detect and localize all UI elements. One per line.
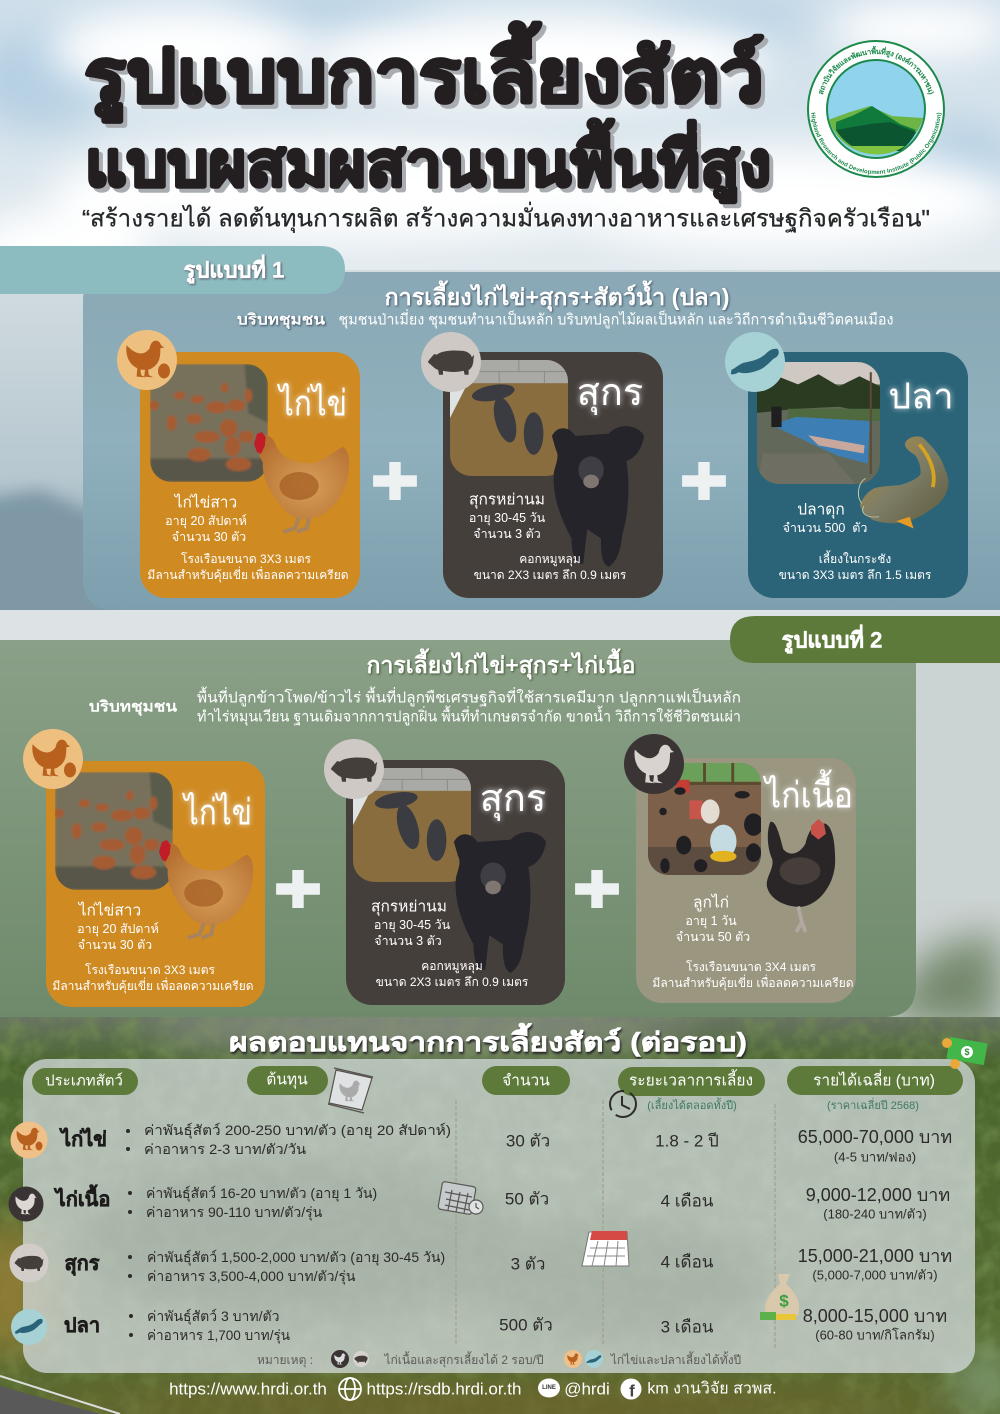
- card: layer hens: มีลานสำหรับคุ้ยเขี่ย เพื่อลดความเครียด: [52, 977, 254, 994]
- card: pigs: [421, 332, 663, 598]
- card: pigs: ขนาด 2X3 เมตร ลึก 0.9 เมตร: [474, 568, 627, 582]
- card: layer hens: ไก่ไข่สาว: [77, 902, 141, 920]
- note: price year: (ราคาเฉลี่ยปี 2568): [827, 1097, 919, 1112]
- logo: HRDI emblem: [807, 40, 945, 178]
- row: fish: (60-80 บาท/กิโลกรัม): [815, 1328, 935, 1342]
- card: fish: เลี้ยงในกระชัง: [819, 550, 891, 566]
- column header: quantity: [482, 1066, 570, 1095]
- community context: [237, 308, 894, 330]
- row: broilers: ค่าพันธุ์สัตว์ 16-20 บาท/ตัว (อายุ 1 วัน): [146, 1185, 377, 1202]
- card: pigs: สุกรหย่านม: [371, 898, 447, 916]
- card: layer hens: โรงเรือนขนาด 3X3 เมตร: [181, 552, 312, 566]
- icon: clock: [610, 1091, 636, 1117]
- panel: model 2: [0, 616, 1000, 1017]
- icon: broiler: [8, 1186, 44, 1222]
- card: fish: ปลา: [888, 376, 954, 416]
- logo: HRDI emblem: Highland Research and Development Institute (Public Organization): [810, 112, 942, 175]
- icon: hen and egg: [117, 330, 177, 390]
- footer: links: https://www.hrdi.or.th: [169, 1380, 327, 1398]
- footer: links: https://rsdb.hrdi.or.th: [367, 1380, 521, 1398]
- card: layer hens: [23, 729, 265, 1007]
- column header: cost: [247, 1066, 328, 1095]
- card: pigs: สุกรหย่านม: [469, 492, 545, 510]
- column header: income: [787, 1066, 963, 1095]
- panel: returns table: [8, 1037, 988, 1373]
- community context: บริบทชุมชน: [89, 698, 178, 716]
- card: fish: ขนาด 3X3 เมตร ลึก 1.5 เมตร: [779, 568, 932, 582]
- card: broilers: ไก่เนื้อ: [762, 768, 853, 816]
- row: pigs: (5,000-7,000 บาท/ตัว): [812, 1268, 938, 1282]
- footnote: ไก่เนื้อและสุกรเลี้ยงได้ 2 รอบ/ปี: [383, 1351, 544, 1368]
- card: broilers: มีลานสำหรับคุ้ยเขี่ย เพื่อลดความเครียด: [652, 974, 854, 991]
- icon: line: LINE: [542, 1385, 556, 1391]
- row: layer hens: ไก่ไข่: [59, 1127, 107, 1151]
- card: broilers: [624, 734, 856, 1003]
- row: pigs: ค่าอาหาร 3,500-4,000 บาท/ตัว/รุ่น: [147, 1268, 356, 1285]
- panel background: [0, 640, 916, 1017]
- title: [84, 22, 771, 202]
- card: layer hens: โรงเรือนขนาด 3X3 เมตร: [85, 963, 216, 977]
- heading: model 1: การเลี้ยงไก่ไข่+สุกร+สัตว์น้ำ (ปลา): [384, 280, 730, 312]
- card: pigs: จำนวน 3 ตัว: [473, 527, 541, 541]
- column header: income: รายได้เฉลี่ย (บาท): [813, 1070, 935, 1090]
- column header: animal type: [32, 1068, 138, 1095]
- footer: links: km งานวิจัย สวพส.: [647, 1380, 777, 1398]
- community context: พื้นที่ปลูกข้าวโพด/ข้าวไร่ พื้นที่ปลูกพืชเศรษฐกิจที่ใช้สารเคมีมาก ปลูกกาแฟเป็นหลัก: [197, 686, 741, 706]
- card: pigs: คอกหมูหลุม: [519, 552, 581, 567]
- footnote: [257, 1350, 741, 1368]
- card: layer hens: จำนวน 30 ตัว: [78, 938, 152, 952]
- community context: ทำไร่หมุนเวียน ฐานเดิมจากการปลูกฝิ่น พื้นที่ทำเกษตรจำกัด ขาดน้ำ วิถีการใช้ชีวิตชนเผ่า: [197, 706, 741, 726]
- icon: line: [538, 1378, 560, 1398]
- column header: quantity: จำนวน: [502, 1072, 550, 1090]
- tab: model 2: รูปแบบที่ 2: [782, 624, 882, 654]
- footnote: หมายเหตุ :: [257, 1353, 313, 1368]
- row: fish: 8,000-15,000 บาท: [803, 1306, 947, 1326]
- heading: model 2: การเลี้ยงไก่ไข่+สุกร+ไก่เนื้อ: [366, 648, 636, 680]
- row: broilers: [8, 1184, 950, 1222]
- icon: feed sack: [328, 1068, 373, 1113]
- title: แบบผสมผสานบนพื้นที่สูง: [85, 118, 771, 202]
- heading: returns: ผลตอบแทนจากการเลี้ยงสัตว์ (ต่อรอบ): [229, 1022, 747, 1057]
- icon: wall calendar: [582, 1231, 629, 1266]
- row: pigs: [10, 1244, 952, 1285]
- icon: planner calendar: [438, 1181, 483, 1215]
- icon: money: [942, 1037, 988, 1069]
- card: layer hens: อายุ 20 สัปดาห์: [165, 514, 247, 529]
- icon: catfish: [725, 332, 785, 392]
- tab: model 1: รูปแบบที่ 1: [184, 254, 284, 284]
- title: รูปแบบการเลี้ยงสัตว์: [84, 22, 764, 122]
- note: all year: (เลี้ยงได้ตลอดทั้งปี): [647, 1097, 737, 1112]
- row: layer hens: 65,000-70,000 บาท: [798, 1127, 952, 1147]
- row: fish: ปลา: [64, 1315, 100, 1337]
- card: pigs: อายุ 30-45 วัน: [374, 918, 451, 933]
- row: layer hens: 30 ตัว: [506, 1132, 550, 1150]
- icon: plus: [682, 462, 726, 500]
- card: broilers: โรงเรือนขนาด 3X4 เมตร: [686, 960, 817, 974]
- row: pigs: 15,000-21,000 บาท: [798, 1246, 952, 1266]
- card: layer hens: มีลานสำหรับคุ้ยเขี่ย เพื่อลดความเครียด: [147, 566, 349, 583]
- row: layer hens: ค่าอาหาร 2-3 บาท/ตัว/วัน: [144, 1141, 306, 1157]
- card: layer hens: ไก่ไข่สาว: [173, 494, 237, 512]
- row: layer hens: 1.8 - 2 ปี: [655, 1132, 719, 1150]
- card: pigs: จำนวน 3 ตัว: [374, 934, 442, 948]
- panel background: [83, 272, 1000, 610]
- card: fish: [725, 332, 968, 598]
- icon: pig: [324, 739, 384, 799]
- icon: plus: [276, 870, 320, 908]
- card: pigs: อายุ 30-45 วัน: [469, 511, 546, 526]
- card: fish: ปลาดุก: [797, 502, 845, 520]
- row: fish: [11, 1306, 947, 1345]
- card: layer hens: ไก่ไข่: [277, 382, 347, 424]
- card: pigs: ขนาด 2X3 เมตร ลึก 0.9 เมตร: [376, 975, 529, 989]
- icon: broiler: [624, 734, 684, 794]
- row: layer hens: ค่าพันธุ์สัตว์ 200-250 บาท/ตัว (อายุ 20 สัปดาห์): [144, 1122, 451, 1139]
- icon: facebook: [620, 1378, 642, 1400]
- tab: model 2: [730, 616, 1000, 663]
- card: pigs: สุกร: [577, 372, 643, 415]
- community context: บริบทชุมชน: [237, 310, 326, 330]
- row: fish: ค่าอาหาร 1,700 บาท/รุ่น: [147, 1327, 290, 1344]
- footnote: ไก่ไข่และปลาเลี้ยงได้ทั้งปี: [610, 1351, 741, 1367]
- row: pigs: สุกร: [64, 1253, 100, 1276]
- card: broilers: อายุ 1 วัน: [685, 914, 737, 929]
- logo: HRDI emblem: สถาบันวิจัยและพัฒนาพื้นที่สูง (องค์การมหาชน): [819, 46, 934, 94]
- card: layer hens: ไก่ไข่: [182, 792, 252, 832]
- card: broilers: ลูกไก่: [693, 894, 729, 912]
- community context: ชุมชนป่าเมี่ยง ชุมชนทำนาเป็นหลัก บริบทปลูกไม้ผลเป็นหลัก และวิถีการดำเนินชีวิตคนเมือง: [338, 308, 894, 330]
- icon: pig: [421, 332, 481, 392]
- row: broilers: (180-240 บาท/ตัว): [823, 1206, 927, 1222]
- row: fish: 3 เดือน: [661, 1318, 714, 1336]
- card: pigs: คอกหมูหลุม: [421, 959, 483, 974]
- column header: duration: ระยะเวลาการเลี้ยง: [629, 1068, 753, 1090]
- icon: catfish: [11, 1309, 47, 1345]
- icon: money bag: [760, 1274, 799, 1320]
- card: pigs: สุกร: [480, 778, 546, 821]
- subtitle: “สร้างรายได้ ลดต้นทุนการผลิต สร้างความมั่นคงทางอาหารและเศรษฐกิจครัวเรือน": [82, 202, 930, 234]
- footer: links: [169, 1378, 777, 1400]
- icon: hen: [10, 1122, 48, 1158]
- icon: plus: [373, 462, 417, 500]
- row: broilers: 4 เดือน: [661, 1192, 714, 1210]
- card: pigs: [324, 739, 565, 1005]
- row: pigs: 4 เดือน: [661, 1252, 714, 1272]
- footer: links: @hrdi: [564, 1380, 610, 1398]
- icon: facebook: f: [629, 1382, 635, 1400]
- community context: [89, 686, 741, 726]
- row: fish: ค่าพันธุ์สัตว์ 3 บาท/ตัว: [147, 1308, 279, 1325]
- card: layer hens: [117, 330, 360, 598]
- row: fish: 500 ตัว: [499, 1316, 553, 1334]
- column header: animal type: ประเภทสัตว์: [45, 1072, 123, 1090]
- row: layer hens: [10, 1122, 952, 1164]
- icon: pig: [10, 1244, 48, 1282]
- card: layer hens: อายุ 20 สัปดาห์: [77, 922, 159, 937]
- card: broilers: จำนวน 50 ตัว: [676, 930, 750, 944]
- column header: cost: ต้นทุน: [266, 1072, 308, 1090]
- icon: globe: [339, 1378, 361, 1400]
- row: broilers: 50 ตัว: [505, 1190, 549, 1208]
- row: pigs: ค่าพันธุ์สัตว์ 1,500-2,000 บาท/ตัว (อายุ 30-45 วัน): [147, 1249, 445, 1266]
- row: broilers: 9,000-12,000 บาท: [806, 1185, 950, 1205]
- icon: money bag: $: [779, 1292, 789, 1310]
- card: layer hens: จำนวน 30 ตัว: [172, 530, 246, 544]
- icon: hen and egg: [23, 729, 83, 789]
- tab: model 1: [0, 246, 345, 294]
- panel: model 1: [0, 246, 1000, 610]
- row: broilers: ค่าอาหาร 90-110 บาท/ตัว/รุ่น: [146, 1204, 323, 1221]
- icon: plus: [575, 870, 619, 908]
- row: layer hens: (4-5 บาท/ฟอง): [834, 1150, 916, 1164]
- row: broilers: ไก่เนื้อ: [54, 1184, 110, 1211]
- column header: duration: [618, 1067, 765, 1096]
- card: fish: จำนวน 500 ตัว: [783, 521, 867, 535]
- icon: money: $: [964, 1047, 970, 1057]
- row: pigs: 3 ตัว: [511, 1254, 545, 1274]
